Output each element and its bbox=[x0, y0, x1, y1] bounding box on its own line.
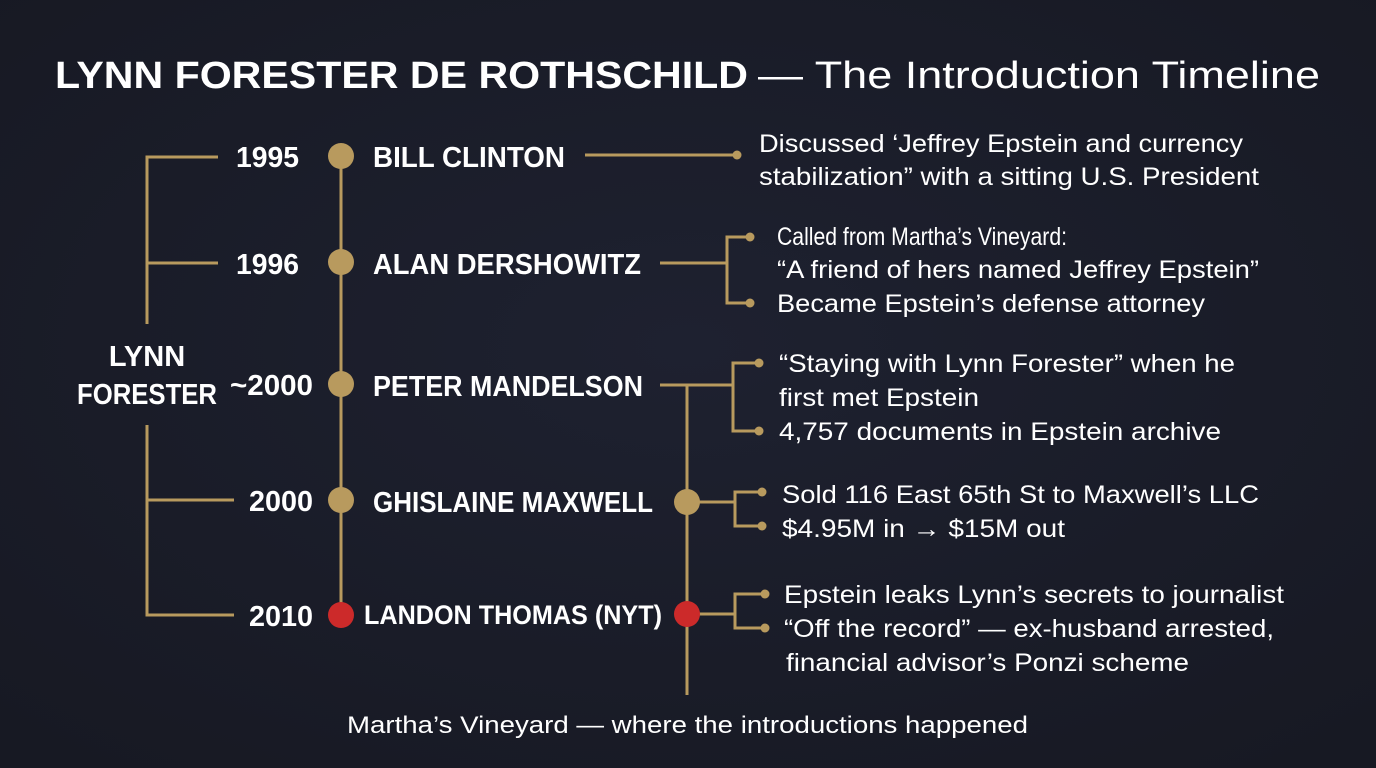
descriptions: Epstein leaks Lynn’s secrets to journalist bbox=[784, 581, 1284, 609]
descriptions: “Staying with Lynn Forester” when he bbox=[779, 350, 1235, 378]
descriptions: “A friend of hers named Jeffrey Epstein” bbox=[777, 256, 1259, 284]
names: PETER MANDELSON bbox=[373, 371, 643, 403]
label: Lynn Forester bbox=[77, 341, 217, 411]
descriptions: stabilization” with a sitting U.S. President bbox=[759, 163, 1259, 191]
names bbox=[364, 142, 662, 630]
years: 1996 bbox=[236, 249, 299, 281]
names: LANDON THOMAS (NYT) bbox=[364, 600, 662, 630]
descriptions: Called from Martha’s Vineyard: bbox=[777, 223, 1067, 251]
label: Lynn Forester: FORESTER bbox=[77, 379, 217, 411]
names: ALAN DERSHOWITZ bbox=[373, 249, 641, 281]
names: GHISLAINE MAXWELL bbox=[373, 487, 653, 519]
title bbox=[55, 55, 1320, 97]
descriptions: first met Epstein bbox=[779, 384, 979, 412]
main timeline bbox=[328, 143, 354, 628]
label: Lynn Forester: LYNN bbox=[109, 341, 185, 373]
years: 1995 bbox=[236, 142, 299, 174]
title: — The Introduction Timeline bbox=[758, 55, 1320, 97]
descriptions: 4,757 documents in Epstein archive bbox=[779, 418, 1221, 446]
connectors bbox=[585, 155, 765, 695]
descriptions: Became Epstein’s defense attorney bbox=[777, 290, 1206, 318]
title: LYNN FORESTER DE ROTHSCHILD bbox=[55, 55, 748, 97]
years: ~2000 bbox=[230, 370, 313, 402]
descriptions bbox=[759, 130, 1284, 677]
years: 2010 bbox=[249, 601, 313, 633]
descriptions: Discussed ‘Jeffrey Epstein and currency bbox=[759, 130, 1244, 158]
names: BILL CLINTON bbox=[373, 142, 565, 174]
footer caption: Martha’s Vineyard — where the introductions happened bbox=[347, 712, 1028, 739]
years: 2000 bbox=[249, 486, 313, 518]
descriptions: “Off the record” — ex-husband arrested, bbox=[784, 615, 1274, 643]
descriptions: Sold 116 East 65th St to Maxwell’s LLC bbox=[782, 481, 1259, 509]
descriptions: financial advisor’s Ponzi scheme bbox=[786, 649, 1189, 677]
descriptions: $4.95M in → $15M out bbox=[782, 515, 1065, 543]
left bracket: Lynn Forester bbox=[147, 157, 234, 615]
years bbox=[230, 142, 313, 633]
